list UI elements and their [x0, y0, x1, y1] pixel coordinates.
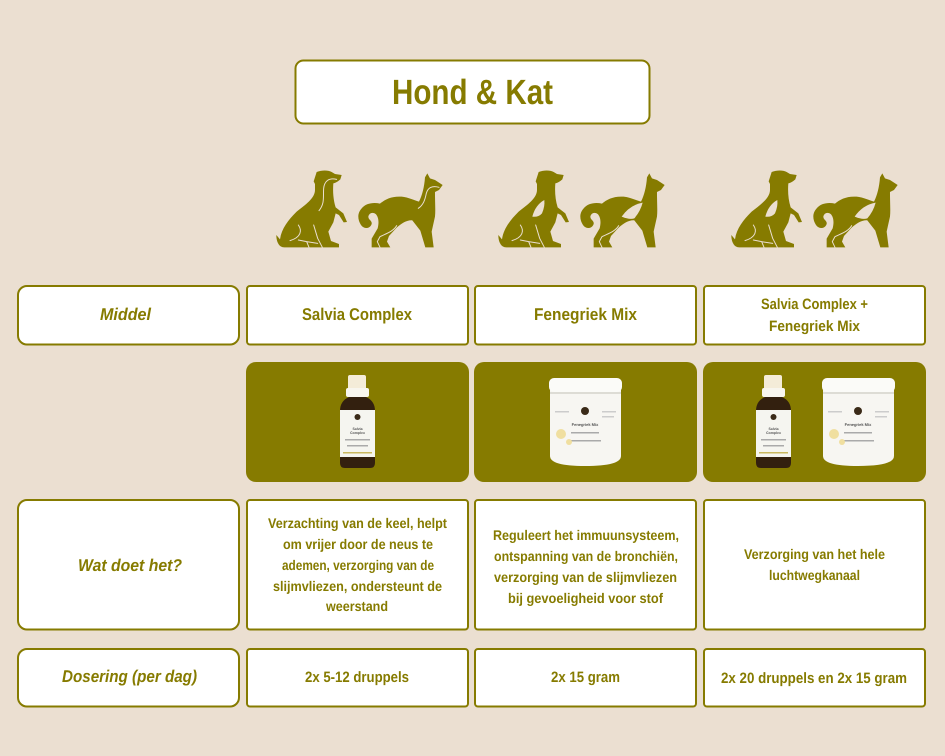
- text: Salvia Complex effect: ademen, verzorging van de: [282, 557, 434, 573]
- panel: Salvia Complex product: [246, 362, 469, 482]
- row: Wat doet het?: [18, 500, 925, 630]
- icon: dog and cat, column 1: [276, 170, 443, 247]
- jar: [822, 378, 895, 466]
- text: combination effect: Verzorging van het hele: [744, 546, 885, 562]
- bottle: [756, 375, 791, 468]
- text: combination effect: [744, 546, 885, 583]
- panel: combination products: [703, 362, 926, 482]
- icon: dog and cat with highlighted lungs, column 3: [731, 170, 898, 247]
- name: combination: [761, 296, 868, 335]
- text: Salvia Complex effect: om vrijer door de neus te: [283, 536, 433, 552]
- text: Fenegriek Mix effect: verzorging van de slijmvliezen: [494, 569, 677, 585]
- jar: Fenegriek Mix: [845, 422, 872, 427]
- row: Middel: [18, 286, 925, 344]
- dose: Salvia Complex: 2x 5-12 druppels: [305, 669, 409, 686]
- name: combination: Salvia Complex +: [761, 296, 868, 313]
- name: combination: Fenegriek Mix: [769, 318, 861, 335]
- row: Dosering: [18, 649, 925, 706]
- text: Fenegriek Mix effect: bij gevoeligheid voor stof: [508, 590, 663, 606]
- text: Fenegriek Mix effect: Reguleert het immuunsysteem,: [493, 527, 679, 543]
- dose: Fenegriek Mix: 2x 15 gram: [551, 669, 620, 686]
- icon: dog and cat with highlighted lungs, column 2: [498, 170, 665, 247]
- text: Salvia Complex effect: slijmvliezen, ondersteunt de: [273, 578, 442, 594]
- bottle: Salvia: [352, 427, 363, 431]
- text: Salvia Complex effect: [268, 515, 447, 614]
- bottle: Complex: [766, 431, 781, 435]
- title box: [296, 60, 650, 124]
- name: Fenegriek Mix: Fenegriek Mix: [534, 305, 637, 324]
- panel: Fenegriek Mix product: [474, 362, 697, 482]
- text: Fenegriek Mix effect: [493, 527, 679, 606]
- bottle: [340, 375, 375, 468]
- bottle: Salvia: [768, 427, 779, 431]
- text: Salvia Complex effect: Verzachting van de keel, helpt: [268, 515, 447, 531]
- label: Wat doet het?: Wat doet het?: [78, 556, 183, 575]
- bottle: Complex: [350, 431, 365, 435]
- label: Dosering: Dosering (per dag): [62, 667, 197, 686]
- row: product images: [246, 362, 926, 482]
- text: Fenegriek Mix effect: ontspanning van de bronchiën,: [494, 548, 678, 564]
- dose: combination: 2x 20 druppels en 2x 15 gram: [721, 670, 907, 687]
- jar: [549, 378, 622, 466]
- text: Salvia Complex effect: weerstand: [325, 598, 388, 614]
- label: Middel: Middel: [100, 305, 152, 324]
- title: Hond & Kat: [392, 73, 553, 112]
- name: Salvia Complex: Salvia Complex: [302, 305, 412, 324]
- text: combination effect: luchtwegkanaal: [769, 567, 860, 583]
- jar: Fenegriek Mix: [572, 422, 599, 427]
